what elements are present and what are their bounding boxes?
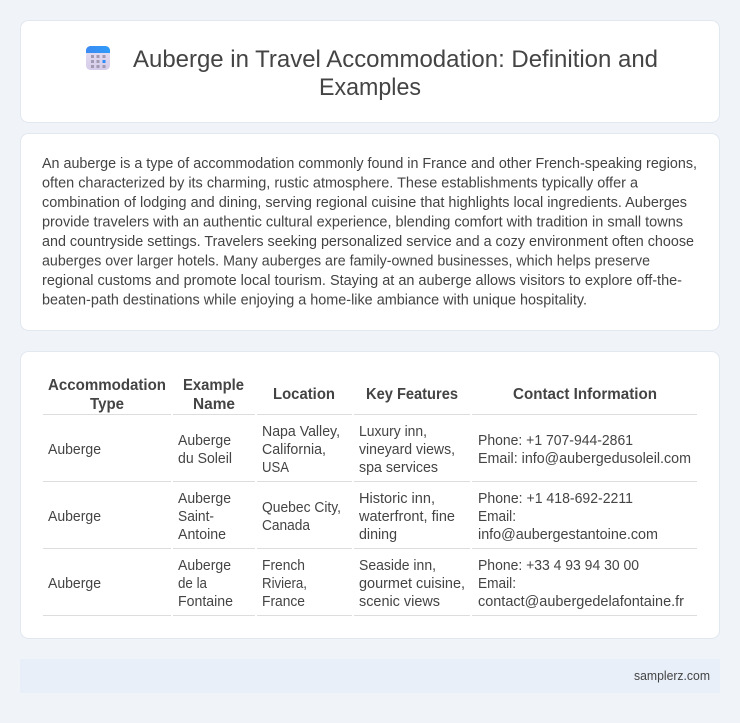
table row: Auberge Saint-Antoine: waterfront, fine: [358, 509, 455, 525]
title: [133, 46, 658, 101]
table row: Auberge Saint-Antoine: Phone: +1 418-692-2211: [478, 491, 633, 507]
title: Examples: [319, 74, 421, 101]
footer text: samplerz.com: [634, 669, 710, 683]
table row: Auberge de la Fontaine: Auberge: [48, 576, 101, 592]
table header row: [48, 377, 657, 413]
table row: Auberge de la Fontaine: Seaside inn,: [359, 558, 436, 574]
panel: description card: [20, 134, 720, 330]
text block: description: often characterized by its charming, rustic atmosphere. These establishments typically offer a: [42, 176, 638, 192]
title: Auberge in Travel Accommodation: Definition and: [133, 46, 658, 73]
table row: Auberge Saint-Antoine: dining: [359, 527, 397, 543]
table row: Auberge Saint-Antoine: Canada: [262, 518, 310, 534]
table header row: Name: [193, 396, 235, 413]
table row: Auberge Saint-Antoine: Antoine: [178, 527, 226, 543]
table row: Auberge du Soleil: Luxury inn,: [359, 424, 427, 440]
table row: Auberge du Soleil: Auberge: [48, 442, 101, 458]
table row: Auberge du Soleil: USA: [262, 460, 289, 476]
table row: Auberge Saint-Antoine: Historic inn,: [359, 491, 435, 507]
text block: description: auberges over larger hotels. Many auberges are family-owned businesses, which helps preserve: [42, 254, 650, 270]
table row: Auberge de la Fontaine: Email:: [478, 576, 516, 592]
table row: Auberge du Soleil: spa services: [359, 460, 438, 476]
table row: Auberge du Soleil: du Soleil: [178, 451, 232, 467]
table row: Auberge de la Fontaine: gourmet cuisine,: [359, 576, 465, 592]
table row: Auberge de la Fontaine: Phone: +33 4 93 94 30 00: [478, 558, 639, 574]
text block: description: combination of lodging and dining, serving regional cuisine that highlights local ingredients. Auberges: [42, 195, 687, 211]
table header row: Contact Information: [513, 386, 657, 403]
table row: Auberge de la Fontaine: [48, 558, 684, 610]
text block: description: and countryside settings. Travelers seeking personalized service and a cozy environment often choose: [42, 234, 694, 250]
text block: description: An auberge is a type of accommodation commonly found in France and other French-speaking regions,: [42, 156, 697, 172]
icon: calendar: [86, 46, 110, 70]
text block: description: provide travelers with an authentic cultural experience, blending comfort with tradition in small towns: [42, 214, 683, 230]
footer bar: [20, 659, 720, 693]
table row: Auberge de la Fontaine: scenic views: [359, 594, 440, 610]
table header row: Accommodation: [48, 377, 166, 394]
table header row: Example: [183, 377, 244, 394]
panel: table card: [20, 352, 720, 638]
table row: Auberge Saint-Antoine: Auberge: [178, 491, 231, 507]
table row: Auberge Saint-Antoine: Saint-: [178, 509, 214, 525]
table row: Auberge de la Fontaine: French: [262, 558, 305, 574]
table header row: Type: [90, 396, 124, 413]
table row: Auberge de la Fontaine: France: [262, 594, 305, 610]
panel: title card: [20, 20, 720, 122]
table row: Auberge de la Fontaine: de la: [178, 576, 207, 592]
table row: Auberge du Soleil: Auberge: [178, 433, 231, 449]
table row: Auberge de la Fontaine: Fontaine: [178, 594, 233, 610]
table row: Auberge du Soleil: Phone: +1 707-944-2861: [478, 433, 633, 449]
table row: Auberge du Soleil: Email: info@aubergedusoleil.com: [478, 451, 691, 467]
table row: Auberge Saint-Antoine: Email:: [478, 509, 516, 525]
table row: Auberge Saint-Antoine: Auberge: [48, 509, 101, 525]
table row: Auberge de la Fontaine: Riviera,: [262, 576, 307, 592]
table row: Auberge Saint-Antoine: info@aubergestantoine.com: [478, 527, 658, 543]
table row: Auberge du Soleil: vineyard views,: [359, 442, 455, 458]
table header row: Key Features: [366, 386, 458, 403]
text block: description: beaten-path destinations while enjoying a home-like ambiance with unique hospitality.: [42, 292, 587, 308]
table row: Auberge Saint-Antoine: Quebec City,: [262, 500, 341, 516]
table header row: Location: [273, 386, 335, 403]
table row: Auberge Saint-Antoine: [48, 491, 658, 543]
table row: Auberge du Soleil: California,: [262, 442, 326, 458]
text block: description: [42, 156, 697, 308]
table row: Auberge du Soleil: [48, 424, 691, 476]
table row: Auberge de la Fontaine: Auberge: [178, 558, 231, 574]
table row: Auberge du Soleil: Napa Valley,: [262, 424, 340, 440]
table row: Auberge de la Fontaine: contact@aubergedelafontaine.fr: [478, 594, 684, 610]
text block: description: regional customs and promote local tourism. Staying at an auberge allows visitors to explore off-the-: [42, 273, 682, 289]
